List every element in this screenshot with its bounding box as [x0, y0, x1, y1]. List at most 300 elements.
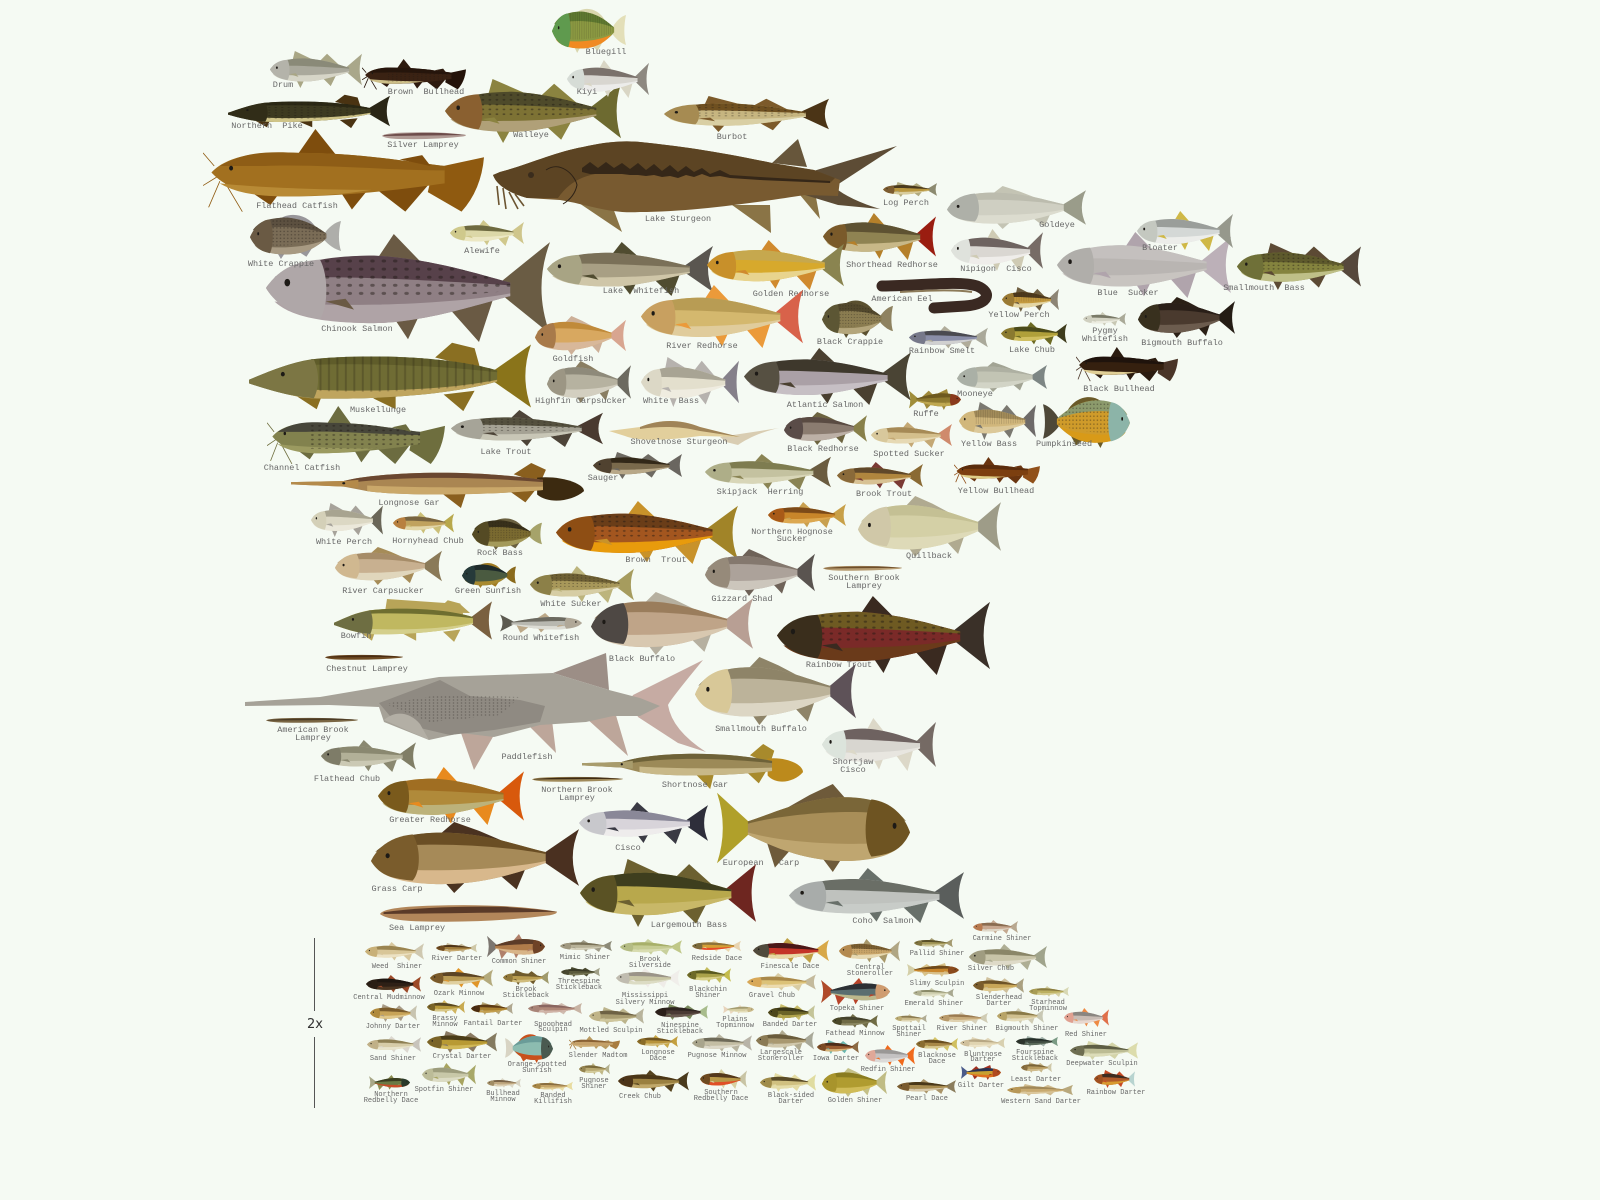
fish: Brook Stickleback: Stickleback [503, 992, 549, 1000]
fish: Lake Whitefish [547, 242, 713, 296]
fish: Fathead Minnow [826, 1014, 885, 1038]
fish: Gravel Chub: Gravel Chub [749, 992, 795, 1000]
fish: Muskellunge: Muskellunge [350, 405, 406, 415]
fish: Kiyi [567, 60, 649, 98]
fish: Sand Shiner: Sand Shiner [370, 1055, 416, 1063]
fish: Ninespine Stickleback [655, 1004, 708, 1036]
fish: Deepwater Sculpin: Deepwater Sculpin [1066, 1060, 1138, 1068]
fish: Quillback [858, 496, 1001, 561]
fish: Cisco [579, 802, 708, 853]
fish: Weed Shiner [365, 942, 424, 971]
fish: Orange-spotted Sunfish: Orange-spotted [508, 1061, 566, 1069]
fish: Creek Chub: Creek Chub [619, 1093, 661, 1101]
fish: Emerald Shiner: Emerald Shiner [905, 1000, 963, 1008]
fish: Yellow Bullhead [954, 457, 1040, 496]
fish: Lake Trout: Lake Trout [480, 447, 532, 457]
fish: Chinook Salmon [266, 234, 550, 342]
fish: Threespine Stickleback: Threespine [558, 978, 600, 986]
fish: Black-sided Darter: Black-sided [768, 1092, 814, 1100]
fish: American Brook Lamprey: American Brook [277, 725, 349, 735]
fish: Johnny Darter: Johnny Darter [366, 1023, 420, 1031]
fish: Blackchin Shiner: Shiner [695, 992, 721, 1000]
fish: White Perch [311, 503, 383, 547]
fish: River Redhorse: River Redhorse [666, 341, 738, 351]
fish: Hornyhead Chub: Hornyhead Chub [392, 536, 464, 546]
fish: Shortjaw Cisco: Cisco [840, 765, 866, 775]
fish: Black Crappie: Black Crappie [817, 337, 883, 347]
fish: Grass Carp [371, 822, 579, 894]
scale marker: 2x: 2x [307, 1017, 323, 1032]
fish: Orange-spotted Sunfish: Sunfish [522, 1067, 552, 1075]
fish: Lake Trout [451, 410, 603, 457]
fish: Chestnut Lamprey [325, 655, 408, 674]
fish: Black Buffalo: Black Buffalo [609, 654, 675, 664]
fish: Flathead Catfish [203, 129, 484, 212]
fish: Longnose Dace: Longnose [641, 1049, 675, 1057]
fish: Log Perch [883, 182, 937, 208]
fish: Bigmouth Shiner: Bigmouth Shiner [995, 1025, 1059, 1033]
fish: Blackchin Shiner: Blackchin [689, 986, 727, 994]
fish: Mimic Shiner [560, 940, 612, 962]
fish: Yellow Perch [988, 287, 1059, 320]
fish: Silver Chub: Silver Chub [968, 965, 1014, 973]
fish: Plains Topminnow: Plains [722, 1016, 748, 1024]
fish: Common Shiner: Common Shiner [492, 958, 546, 966]
fish: River Darter: River Darter [432, 955, 482, 963]
fish: Spottail Shiner: Shiner [896, 1031, 922, 1039]
fish: Largemouth Bass [580, 859, 756, 930]
fish: Pugnose Shiner: Pugnose [579, 1077, 609, 1085]
fish: Slimy Sculpin: Slimy Sculpin [910, 980, 964, 988]
fish: Southern Redbelly Dace: Redbelly Dace [694, 1095, 748, 1103]
fish: Bullhead Minnow: Minnow [490, 1096, 516, 1104]
fish: Banded Killifish: Killifish [534, 1098, 572, 1106]
fish: Black Buffalo [591, 592, 753, 664]
fish: Pugnose Shiner: Shiner [581, 1083, 607, 1091]
fish: Bluegill: Bluegill [586, 47, 626, 57]
fish: Ruffe: Ruffe [913, 409, 939, 419]
fish: Shorthead Redhorse [823, 213, 938, 270]
fish: Brook Silverside [620, 939, 682, 970]
fish: Least Darter: Least Darter [1011, 1076, 1061, 1084]
fish: Blacknose Dace [916, 1037, 958, 1066]
fish: Brook Stickleback [503, 970, 549, 1000]
fish: Shortnose Gar [582, 744, 803, 790]
fish: Golden Shiner: Golden Shiner [828, 1097, 882, 1105]
fish: White Bass [641, 357, 739, 407]
fish: Southern Redbelly Dace: Southern [704, 1089, 738, 1097]
fish: Yellow Bass [959, 402, 1036, 449]
fish: Ninespine Stickleback: Ninespine [661, 1022, 699, 1030]
fish: Spoonhead Sculpin: Spoonhead [534, 1021, 572, 1029]
fish: Brassy Minnow: Minnow [432, 1021, 458, 1029]
fish: Gilt Darter [958, 1065, 1004, 1090]
fish: Topeka Shiner [821, 978, 890, 1013]
fish: Ozark Minnow [430, 968, 493, 998]
fish: Bigmouth Buffalo [1138, 297, 1235, 348]
fish: Bigmouth Buffalo: Bigmouth Buffalo [1141, 338, 1223, 348]
fish: Pallid Shiner: Pallid Shiner [910, 950, 964, 958]
fish: Black Bullhead [1076, 347, 1178, 394]
fish: Carmine Shiner: Carmine Shiner [973, 935, 1031, 943]
fish: Iowa Darter [813, 1040, 859, 1063]
fish: Johnny Darter [366, 1004, 420, 1031]
fish: Starhead Topminnow: Starhead [1031, 999, 1065, 1007]
fish: Largescale Stoneroller: Stoneroller [758, 1055, 804, 1063]
fish: Northern Hognose Sucker: Northern Hognose [751, 527, 833, 537]
fish: Northern Pike: Northern Pike [231, 121, 303, 131]
fish: Western Sand Darter: Western Sand Darter [1001, 1098, 1081, 1106]
fish: Northern Brook Lamprey: Lamprey [559, 793, 595, 803]
fish: Atlantic Salmon: Atlantic Salmon [787, 400, 863, 410]
fish: Coho Salmon: Coho Salmon [852, 916, 914, 926]
fish: European Carp [717, 784, 910, 872]
fish: Brook Trout [837, 462, 923, 499]
fish: Shorthead Redhorse: Shorthead Redhorse [846, 260, 938, 270]
fish: Green Sunfish: Green Sunfish [455, 586, 521, 596]
fish: Shovelnose Sturgeon [609, 421, 779, 447]
fish: Bullhead Minnow [486, 1078, 521, 1104]
fish: River Redhorse [641, 285, 803, 351]
fish: Brown Bullhead [362, 59, 466, 97]
fish: Gizzard Shad [705, 549, 815, 604]
fish: Cisco: Cisco [615, 843, 641, 853]
fish: Sea Lamprey [380, 905, 557, 933]
fish: Pygmy Whitefish: Whitefish [1082, 334, 1128, 344]
fish: Bowfin [334, 599, 492, 642]
fish: Northern Redbelly Dace: Redbelly Dace [364, 1097, 418, 1105]
fish: Pugnose Shiner [579, 1063, 610, 1091]
fish: Mississippi Silvery Minnow [616, 968, 680, 1007]
fish: River Shiner: River Shiner [937, 1025, 987, 1033]
fish: Atlantic Salmon [744, 348, 911, 410]
fish: Kiyi: Kiyi [577, 87, 597, 97]
fish: Southern Brook Lamprey [823, 566, 902, 591]
fish: Yellow Bass: Yellow Bass [961, 439, 1017, 449]
fish: Mooneye: Mooneye [957, 389, 993, 399]
fish: Mimic Shiner: Mimic Shiner [560, 954, 610, 962]
fish: Western Sand Darter [1001, 1084, 1081, 1106]
fish: American Brook Lamprey: Lamprey [295, 733, 331, 743]
fish: Skipjack Herring: Skipjack Herring [717, 487, 803, 497]
fish: Black Redhorse: Black Redhorse [787, 444, 859, 454]
fish: Channel Catfish: Channel Catfish [264, 463, 340, 473]
fish: Plains Topminnow: Topminnow [716, 1022, 755, 1030]
fish: Lake Chub [1001, 322, 1067, 355]
fish: Shortnose Gar: Shortnose Gar [662, 780, 728, 790]
fish: Shortjaw Cisco [822, 718, 936, 775]
fish: Red Shiner: Red Shiner [1065, 1031, 1107, 1039]
fish: Finescale Dace: Finescale Dace [761, 963, 819, 971]
fish: Fourspine Stickleback: Stickleback [1012, 1055, 1058, 1063]
fish: Skipjack Herring [705, 454, 831, 497]
fish: Northern Redbelly Dace: Northern [374, 1091, 408, 1099]
fish: Least Darter [1011, 1062, 1061, 1084]
fish: Brook Stickleback: Brook [515, 986, 537, 994]
fish: Yellow Bullhead: Yellow Bullhead [958, 486, 1034, 496]
fish: Banded Darter: Banded Darter [763, 1021, 817, 1029]
fish: Pumpkinseed: Pumpkinseed [1036, 439, 1092, 449]
fish: Green Sunfish [455, 563, 521, 596]
fish: Sauger: Sauger [588, 473, 618, 483]
fish: Crystal Darter [427, 1031, 497, 1061]
fish: Goldfish [535, 316, 626, 364]
fish: Central Stoneroller [839, 939, 900, 978]
fish: Grass Carp: Grass Carp [371, 884, 423, 894]
fish: Lake Sturgeon [493, 139, 897, 233]
fish: American Eel: American Eel [871, 294, 933, 304]
fish: Chinook Salmon: Chinook Salmon [321, 324, 393, 334]
fish: Greater Redhorse: Greater Redhorse [389, 815, 471, 825]
fish: Mississippi Silvery Minnow: Silvery Minnow [616, 999, 675, 1007]
fish: Creek Chub [618, 1070, 689, 1101]
fish: Paddlefish [245, 653, 706, 770]
fish: Spotted Sucker: Spotted Sucker [873, 449, 945, 459]
fish: Redfin Shiner: Redfin Shiner [861, 1066, 915, 1074]
fish: American Eel [871, 283, 986, 308]
fish: Fantail Darter [464, 1002, 522, 1028]
fish: River Carpsucker: River Carpsucker [342, 586, 424, 596]
fish: Spoonhead Sculpin: Sculpin [538, 1026, 568, 1034]
fish: Walleye: Walleye [513, 130, 549, 140]
fish: Common Shiner [487, 934, 546, 966]
fish: Brown Bullhead: Brown Bullhead [388, 87, 464, 97]
fish: Bloater: Bloater [1142, 243, 1178, 253]
fish: Burbot [664, 96, 829, 142]
fish: Goldfish: Goldfish [553, 354, 593, 364]
fish: Lake Sturgeon: Lake Sturgeon [645, 214, 711, 224]
fish: Alewife [450, 220, 524, 256]
fish: Flathead Chub [314, 740, 416, 784]
fish: Rainbow Smelt: Rainbow Smelt [909, 346, 975, 356]
fish: Sauger [588, 452, 682, 483]
fish: Largescale Stoneroller: Largescale [760, 1049, 802, 1057]
fish: Gravel Chub [747, 973, 816, 1000]
fish: Mottled Sculpin: Mottled Sculpin [579, 1027, 643, 1035]
fish: River Carpsucker [335, 547, 442, 596]
fish: White Bass: White Bass [643, 396, 699, 406]
fish: Banded Killifish [532, 1081, 573, 1106]
fish: Bluntnose Darter: Bluntnose [964, 1051, 1002, 1059]
fish: White Sucker [530, 566, 634, 609]
fish: American Brook Lamprey [266, 718, 358, 743]
fish: Brassy Minnow: Brassy [432, 1015, 458, 1023]
fish: Finescale Dace [753, 938, 829, 971]
fish: Slenderhead Darter: Slenderhead [976, 994, 1022, 1002]
fish: Red Shiner [1064, 1008, 1109, 1039]
fish: Slenderhead Darter: Darter [986, 1000, 1012, 1008]
fish: Golden Shiner [822, 1068, 887, 1105]
fish: Round Whitefish [500, 613, 582, 643]
fish: Silver Lamprey: Silver Lamprey [387, 140, 459, 150]
fish: White Crappie: White Crappie [248, 259, 314, 269]
fish: Northern Pike [228, 95, 390, 131]
fish: Muskellunge [249, 343, 531, 415]
fish: Yellow Perch: Yellow Perch [988, 310, 1050, 320]
fish: Crystal Darter: Crystal Darter [433, 1053, 491, 1061]
fish: Golden Redhorse [707, 240, 844, 299]
fish: Blue Sucker [1057, 232, 1231, 298]
fish: Golden Redhorse: Golden Redhorse [753, 289, 829, 299]
fish: Ninespine Stickleback: Stickleback [657, 1028, 703, 1036]
fish: Highfin Carpsucker: Highfin Carpsucker [535, 396, 627, 406]
fish: Burbot: Burbot [717, 132, 747, 142]
fish: Brassy Minnow [427, 1000, 465, 1029]
fish: Sea Lamprey: Sea Lamprey [389, 923, 445, 933]
fish: Southern Redbelly Dace [694, 1069, 748, 1103]
fish: Shovelnose Sturgeon: Shovelnose Sturgeon [631, 437, 727, 447]
fish: Northern Brook Lamprey [532, 777, 623, 803]
fish: Blacknose Dace: Blacknose [918, 1052, 956, 1060]
fish: Lake Whitefish: Lake Whitefish [603, 286, 679, 296]
fish: Hornyhead Chub [392, 512, 464, 546]
fish: Bluntnose Darter: Darter [970, 1056, 996, 1064]
fish: Rainbow Smelt [909, 326, 988, 356]
fish: Spottail Shiner: Spottail [892, 1025, 926, 1033]
fish: Bluntnose Darter [960, 1037, 1005, 1064]
fish: Mottled Sculpin [579, 1007, 644, 1035]
fish: Pugnose Minnow [688, 1034, 752, 1060]
fish: Southern Brook Lamprey: Lamprey [846, 581, 882, 591]
fish: Rock Bass: Rock Bass [477, 548, 523, 558]
fish: Bloater [1137, 211, 1233, 253]
fish: Redside Dace: Redside Dace [692, 955, 742, 963]
fish: Spotted Sucker [871, 422, 952, 459]
fish: Brook Trout: Brook Trout [856, 489, 912, 499]
fish: Spotfin Shiner [415, 1063, 476, 1094]
fish: Flathead Chub: Flathead Chub [314, 774, 380, 784]
fish: Walleye [445, 79, 621, 143]
fish: Iowa Darter: Iowa Darter [813, 1055, 859, 1063]
fish: Lake Chub: Lake Chub [1009, 345, 1055, 355]
fish: Smallmouth Buffalo: Smallmouth Buffalo [715, 724, 807, 734]
fish: Threespine Stickleback: Stickleback [556, 984, 602, 992]
fish: Slenderhead Darter [973, 977, 1024, 1008]
fish: Black Bullhead: Black Bullhead [1083, 384, 1155, 394]
fish: Highfin Carpsucker [535, 361, 631, 406]
fish: Goldeye [947, 186, 1086, 230]
fish: Bigmouth Shiner [995, 1008, 1059, 1033]
fish: Blue Sucker: Blue Sucker [1097, 288, 1159, 298]
fish: Rainbow Trout: Rainbow Trout [806, 660, 872, 670]
fish: Banded Killifish: Banded [540, 1092, 566, 1100]
fish: Fourspine Stickleback: Fourspine [1016, 1049, 1054, 1057]
fish: Log Perch: Log Perch [883, 198, 929, 208]
fish: Pearl Dace: Pearl Dace [906, 1095, 948, 1103]
fish: Rainbow Trout [777, 596, 990, 675]
fish: Central Stoneroller: Central [855, 964, 885, 972]
fish: Bowfin: Bowfin [341, 631, 371, 641]
fish: Spotfin Shiner: Spotfin Shiner [415, 1086, 473, 1094]
fish: Northern Hognose Sucker [751, 502, 846, 544]
fish: Northern Redbelly Dace [364, 1075, 418, 1105]
fish: Carmine Shiner [973, 920, 1031, 943]
fish: Channel Catfish [264, 406, 445, 473]
fish: Mississippi Silvery Minnow: Mississippi [622, 992, 668, 1000]
fish: Largescale Stoneroller [756, 1030, 814, 1063]
fish: Central Stoneroller: Stoneroller [847, 970, 893, 978]
fish: Fantail Darter: Fantail Darter [464, 1020, 522, 1028]
fish: Weed Shiner: Weed Shiner [372, 963, 422, 971]
fish: White Crappie [248, 215, 341, 269]
fish: Longnose Dace [637, 1035, 678, 1063]
fish: Sand Shiner [367, 1036, 421, 1063]
fish: Longnose Gar: Longnose Gar [378, 498, 440, 508]
fish: Brown Trout [556, 501, 738, 565]
fish: Starhead Topminnow [1029, 986, 1069, 1013]
fish: Southern Brook Lamprey: Southern Brook [828, 573, 900, 583]
fish: Silver Lamprey [382, 132, 466, 150]
fish: Round Whitefish: Round Whitefish [503, 633, 579, 643]
fish: Nipigon Cisco: Nipigon Cisco [960, 264, 1032, 274]
fish: Blacknose Dace: Dace [929, 1058, 945, 1066]
fish: Orange-spotted Sunfish [505, 1034, 566, 1075]
fish: Pumpkinseed [1036, 397, 1130, 449]
fish: Pugnose Minnow: Pugnose Minnow [688, 1052, 747, 1060]
fish: Spoonhead Sculpin [528, 1002, 582, 1034]
fish: Redside Dace [692, 940, 742, 963]
fish: Rock Bass [472, 518, 542, 558]
fish: Black Redhorse [784, 412, 867, 454]
fish: Black-sided Darter: Darter [778, 1098, 804, 1106]
fish: Quillback: Quillback [906, 551, 952, 561]
fish: Black Crappie [817, 301, 893, 347]
fish: Pearl Dace [897, 1079, 956, 1103]
fish: Mooneye [957, 362, 1047, 399]
fish: Northern Hognose Sucker: Sucker [777, 534, 807, 544]
fish: Drum [270, 51, 362, 90]
fish: Bluegill [552, 9, 626, 57]
fish: Ruffe [909, 389, 961, 419]
fish: Redfin Shiner [861, 1045, 915, 1074]
fish: Slender Madtom [569, 1036, 627, 1060]
fish: Plains Topminnow [716, 1005, 755, 1030]
fish: White Sucker: White Sucker [540, 599, 602, 609]
fish: Spottail Shiner [892, 1014, 927, 1039]
fish: Chestnut Lamprey: Chestnut Lamprey [326, 664, 408, 674]
fish: Gilt Darter: Gilt Darter [958, 1082, 1004, 1090]
fish: Banded Darter [763, 1004, 817, 1029]
fish: Goldeye: Goldeye [1039, 220, 1075, 230]
fish: Coho Salmon [789, 868, 964, 926]
fish: Smallmouth Bass: Smallmouth Bass [1223, 283, 1305, 293]
fish: Topeka Shiner: Topeka Shiner [830, 1005, 884, 1013]
fish: White Perch: White Perch [316, 537, 372, 547]
fish: Black-sided Darter [760, 1073, 816, 1106]
fish: Central Mudminnow [353, 975, 426, 1002]
fish: Brown Trout: Brown Trout [625, 555, 687, 565]
fish: Threespine Stickleback [556, 967, 602, 992]
fish: Pygmy Whitefish [1082, 312, 1128, 344]
fish: Pallid Shiner [910, 938, 964, 958]
fish: Brook Silverside: Brook [639, 956, 661, 964]
fish: European Carp: European Carp [723, 858, 799, 868]
fish: Central Mudminnow: Central Mudminnow [353, 994, 426, 1002]
fish: Longnose Dace: Dace [650, 1055, 666, 1063]
fish: Paddlefish: Paddlefish [501, 752, 553, 762]
fish: Slimy Sculpin [907, 963, 964, 988]
fish: Starhead Topminnow: Topminnow [1029, 1005, 1068, 1013]
fish: Largemouth Bass: Largemouth Bass [651, 920, 727, 930]
fish: Brook Silverside: Silverside [629, 962, 671, 970]
fish: River Shiner [937, 1012, 988, 1033]
fish: Gizzard Shad: Gizzard Shad [711, 594, 773, 604]
fish: Ozark Minnow: Ozark Minnow [434, 990, 485, 998]
fish: Greater Redhorse [378, 767, 524, 825]
fish: Northern Brook Lamprey: Northern Brook [541, 785, 613, 795]
fish: Rainbow Darter [1087, 1070, 1145, 1097]
fish: Bullhead Minnow: Bullhead [486, 1090, 520, 1098]
